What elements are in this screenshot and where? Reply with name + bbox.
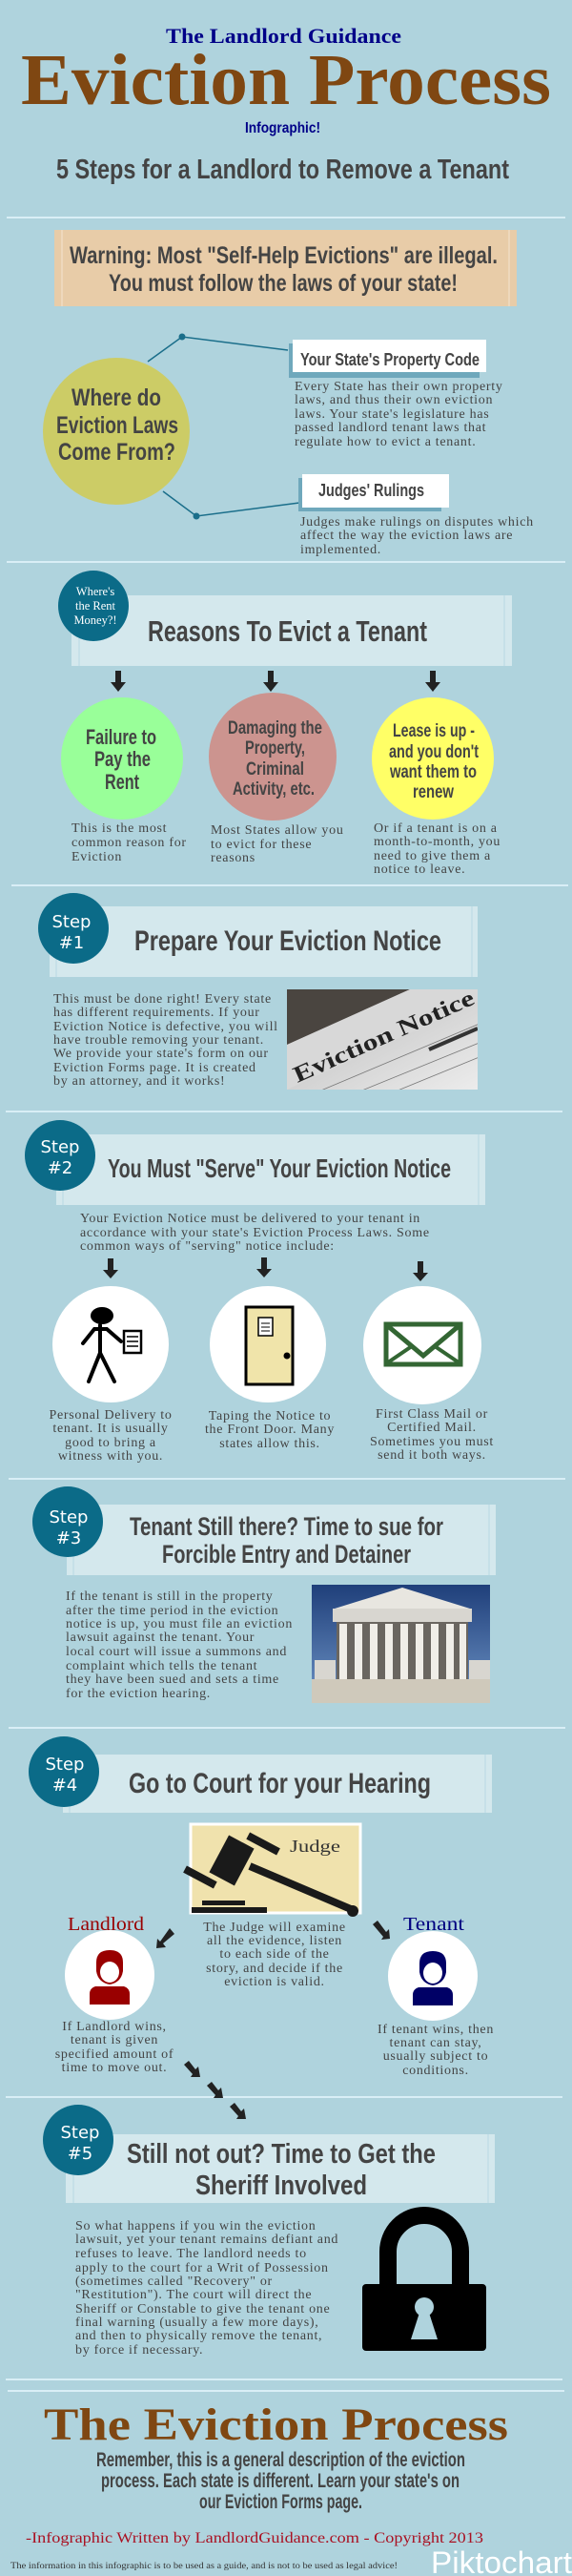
badge: where's the rent money: the Rent (75, 599, 116, 613)
text: property code: laws, and thus their own eviction (295, 393, 493, 407)
text: landlord wins: If Landlord wins, (62, 2020, 167, 2034)
text: refuses to leave. The landlord needs to (75, 2247, 307, 2261)
icon: padlock (362, 2215, 486, 2351)
text: accordance with your state's Eviction Process Laws. Some (80, 1226, 430, 1240)
text: reason captions: reasons (211, 851, 255, 865)
step badge (43, 2105, 113, 2175)
text: judges (300, 515, 534, 557)
text (53, 992, 278, 1089)
circle: failure to pay: Rent (105, 770, 139, 794)
banner (63, 1755, 492, 1813)
text: final warning (usually a few more days), (75, 2316, 318, 2330)
step badge (25, 1120, 95, 1191)
circle: lease is up: renew (413, 782, 454, 802)
circle: lease is up: and you don't (389, 742, 480, 762)
text: reason captions (72, 821, 500, 877)
banner (66, 2134, 495, 2203)
label: Infographic!: Infographic! (245, 120, 320, 136)
step 1 (38, 893, 486, 1102)
text: they have been sued and sets a time (66, 1672, 279, 1687)
box: Your State's Property Code: Your State's Property Code (300, 350, 480, 369)
arrows: judge to parties (156, 1921, 390, 1948)
disclaimer: The information in this infographic is to be used as a guide, and is not to be used as legal advice! (10, 2561, 398, 2570)
text: reason captions: Or if a tenant is on a (374, 821, 498, 836)
text: reason captions: notice to leave. (374, 862, 465, 877)
captions: send it both ways. (378, 1448, 486, 1463)
badge: where's the rent money (58, 571, 129, 641)
text: judge: to each side of the (219, 1947, 330, 1962)
text: property code (295, 380, 503, 449)
circle: damaging property: Activity, etc. (233, 779, 315, 800)
text: landlord wins (55, 2020, 174, 2075)
step badge: Step (46, 1755, 84, 1775)
circle: damaging property: Criminal (246, 759, 304, 779)
text: This must be done right! Every state (53, 992, 272, 1007)
text: We provide your state's form on our (53, 1047, 269, 1061)
text: common ways of "serving" notice include: (80, 1239, 335, 1254)
step badge: #3 (56, 1528, 81, 1548)
text: judges: affect the way the eviction laws are (300, 529, 513, 543)
banner: Go to Court for your Hearing (129, 1768, 431, 1799)
text: local court will issue a summons and (66, 1645, 287, 1659)
text: have trouble removing your tenant. (53, 1033, 264, 1048)
step badge: Step (50, 1507, 88, 1527)
icon: personal delivery (52, 1286, 169, 1402)
text: apply to the court for a Writ of Possession (75, 2261, 329, 2275)
captions: witness with you. (58, 1449, 163, 1464)
step badge (29, 1736, 99, 1807)
text: tenant wins (378, 2023, 494, 2078)
step badge: #1 (59, 933, 84, 953)
circle: failure to pay (61, 697, 183, 820)
text: "Restitution"). The court will direct the (75, 2288, 312, 2302)
warning box (54, 230, 517, 306)
image: courthouse (312, 1585, 490, 1703)
text: Sheriff or Constable to give the tenant one (75, 2302, 330, 2316)
banner: Still not out? Time to Get the (127, 2139, 436, 2170)
text: judges: Judges make rulings on disputes which (300, 515, 534, 530)
text: property code: regulate how to evict a tenant. (295, 435, 476, 449)
label: landlord: Landlord (68, 1914, 144, 1935)
circle: question: Come From? (58, 439, 175, 466)
banner: Reasons To Evict a Tenant (148, 614, 427, 648)
text: reason captions: This is the most (72, 821, 167, 836)
banner (50, 906, 478, 977)
text: by force if necessary. (75, 2343, 203, 2358)
text: judge: story, and decide if the (206, 1962, 343, 1976)
footer title: The Eviction Process (44, 2399, 508, 2450)
text: lawsuit against the tenant. Your (66, 1631, 255, 1645)
captions: tenant. It is usually (52, 1422, 169, 1436)
text: landlord wins: time to move out. (62, 2061, 167, 2075)
step 4 (29, 1736, 494, 2119)
text: tenant wins: tenant can stay, (390, 2036, 481, 2050)
icon: mail (363, 1286, 481, 1404)
box: Judges' Rulings: Judges' Rulings (318, 481, 424, 500)
text: Your Eviction Notice must be delivered to your tenant in (80, 1212, 420, 1226)
connector lines (148, 337, 299, 516)
box: Your State's Property Code (289, 340, 486, 378)
text: judges: implemented. (300, 543, 381, 557)
circle: failure to pay: Failure to (86, 725, 156, 749)
text: property code: passed landlord tenant laws that (295, 421, 486, 435)
text: reason captions: month-to-month, you (374, 835, 500, 849)
footer note (96, 2449, 465, 2513)
captions: First Class Mail or (376, 1407, 488, 1422)
circle: damaging property: Property, (245, 738, 305, 758)
text: judge: all the evidence, listen (207, 1934, 342, 1948)
circle: failure to pay: Pay the (94, 747, 151, 771)
text: property code: laws. Your state's legislature has (295, 407, 489, 422)
banner (72, 595, 512, 666)
text: If the tenant is still in the property (66, 1589, 274, 1604)
text: property code: Every State has their own property (295, 380, 503, 394)
text: judge: eviction is valid. (224, 1975, 325, 1989)
captions: states allow this. (219, 1437, 320, 1451)
header (21, 24, 551, 185)
panel: where do eviction laws come from (43, 334, 534, 557)
circle: question: Eviction Laws (56, 412, 178, 439)
footer note: our Eviction Forms page. (199, 2491, 362, 2513)
icon: landlord person (65, 1930, 154, 2020)
text: Eviction Notice is defective, you will (53, 1020, 278, 1034)
captions: Personal Delivery to (49, 1408, 173, 1423)
icon: judge gavel (183, 1824, 360, 1917)
step badge: Step (41, 1137, 79, 1157)
icon: tenant person (388, 1931, 478, 2021)
credit: -Infographic Written by LandlordGuidance.com - Copyright 2013 (26, 2530, 483, 2546)
text: by an attorney, and it works! (53, 1074, 225, 1089)
text: tenant wins: usually subject to (383, 2049, 488, 2064)
arrows: chain to step 5 (184, 2061, 246, 2119)
circle: damaging property (209, 693, 337, 821)
text: tenant wins: conditions. (402, 2064, 469, 2078)
warning box: You must follow the laws of your state! (109, 270, 458, 297)
text: complaint which tells the tenant (66, 1659, 257, 1673)
step badge: #2 (48, 1158, 72, 1178)
circle: question: Where do (72, 384, 161, 411)
captions: good to bring a (65, 1436, 156, 1450)
title: Eviction Process: Eviction Process (21, 40, 551, 120)
text: reason captions: to evict for these (211, 838, 312, 852)
step badge: Step (61, 2123, 99, 2143)
badge: where's the rent money: Where's (76, 585, 114, 598)
captions: the Front Door. Many (205, 1423, 335, 1437)
circle: lease is up: want them to (389, 762, 477, 782)
step badge: #4 (52, 1776, 77, 1796)
icon: door (210, 1286, 326, 1402)
section: reasons to evict (58, 571, 512, 877)
subtitle: The Landlord Guidance: The Landlord Guidance (166, 24, 401, 48)
text: lawsuit, yet your tenant remains defiant and (75, 2233, 338, 2247)
text (75, 2219, 338, 2358)
step badge (32, 1486, 103, 1557)
text: reason captions: Eviction (72, 850, 122, 864)
circle: lease is up: Lease is up - (393, 721, 475, 741)
banner: Tenant Still there? Time to sue for (130, 1512, 443, 1541)
text: judge: The Judge will examine (203, 1921, 346, 1935)
text: reason captions: need to give them a (374, 849, 491, 863)
banner (56, 1134, 485, 1205)
step badge: Step (52, 912, 91, 932)
text: reason captions: Most States allow you (211, 823, 344, 838)
text: notice is up, you must file an eviction (66, 1617, 293, 1631)
arrows (103, 1257, 428, 1281)
captions (49, 1407, 494, 1464)
captions: Certified Mail. (387, 1421, 477, 1435)
text (66, 1589, 293, 1701)
box: Judges' Rulings (298, 474, 449, 511)
icon: judge gavel: Judge (290, 1837, 340, 1856)
banner (67, 1505, 496, 1575)
banner: Forcible Entry and Detainer (162, 1540, 411, 1568)
text: So what happens if you win the eviction (75, 2219, 316, 2233)
banner: Sheriff Involved (195, 2171, 367, 2201)
text: judge (203, 1921, 346, 1989)
text: for the eviction hearing. (66, 1687, 211, 1701)
banner: Prepare Your Eviction Notice (134, 925, 441, 957)
text: landlord wins: specified amount of (55, 2047, 174, 2062)
step badge (38, 893, 109, 964)
circle: damaging property: Damaging the (228, 718, 322, 738)
text: (sometimes called "Recovery" or (75, 2275, 273, 2289)
step 5 (43, 2105, 495, 2358)
step badge: #5 (68, 2144, 92, 2164)
image: eviction notice (287, 989, 478, 1090)
text: has different requirements. If your (53, 1006, 260, 1020)
circle: lease is up (372, 697, 494, 820)
text: landlord wins: tenant is given (71, 2033, 158, 2047)
text: tenant wins: If tenant wins, then (378, 2023, 494, 2037)
footer (10, 2399, 572, 2576)
text (80, 1212, 430, 1254)
captions: Sometimes you must (370, 1435, 494, 1449)
text: Eviction Forms page. It is created (53, 1061, 256, 1075)
step 3 (32, 1486, 496, 1703)
label: tenant: Tenant (403, 1914, 465, 1935)
badge: where's the rent money: Money?! (73, 613, 117, 627)
image: eviction notice: Eviction Notice (290, 986, 479, 1088)
circle: question (43, 358, 190, 505)
text: reason captions: common reason for (72, 836, 187, 850)
text: and then to physically remove the tenant, (75, 2329, 322, 2343)
step 2 (25, 1120, 494, 1464)
arrows (111, 671, 440, 692)
text: after the time period in the eviction (66, 1604, 278, 1618)
captions: Taping the Notice to (209, 1409, 331, 1423)
